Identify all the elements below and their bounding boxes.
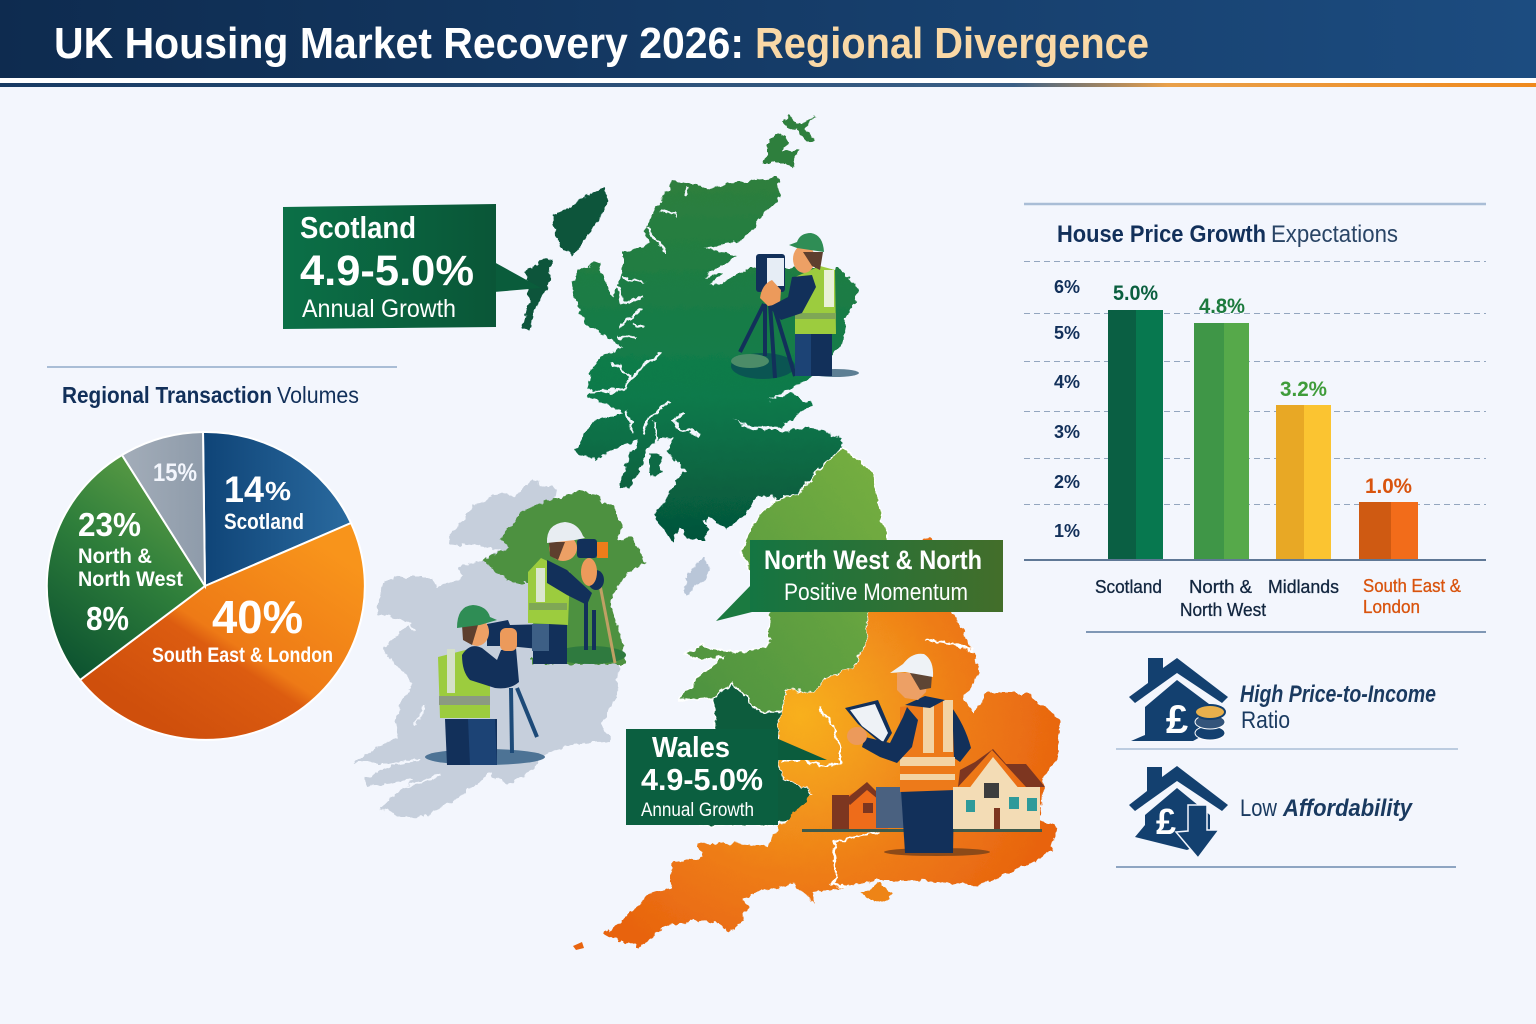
small orange house <box>832 782 889 829</box>
legs <box>901 790 954 853</box>
growth range: 4.9-5.0% <box>641 762 763 797</box>
safety vest <box>795 266 836 334</box>
Republic of Ireland landmass <box>353 480 618 818</box>
bar: Midlands: 3.2% <box>1280 378 1327 401</box>
camera device <box>756 254 785 292</box>
bar: South East & London: 1.0% <box>1365 475 1412 498</box>
bar: North & North West <box>1194 295 1249 560</box>
pie chart <box>47 432 365 740</box>
tripod legs <box>586 600 594 650</box>
regional boundaries <box>783 640 973 888</box>
box <box>626 729 778 825</box>
label: North & North West: North West <box>78 568 183 591</box>
bar: Scotland <box>1108 282 1163 560</box>
arm <box>862 707 918 763</box>
box <box>283 204 496 329</box>
y axis labels: 2% <box>1054 472 1080 492</box>
ground <box>554 646 626 664</box>
text: High Price-to-Income Ratio: High Price-to-Income <box>1240 681 1436 708</box>
title: UK Housing Market Recovery 2026: <box>54 19 744 68</box>
legs <box>533 624 567 664</box>
box <box>750 540 1003 612</box>
label: 40%: 40% <box>212 591 303 643</box>
slice: Scotland <box>203 432 351 586</box>
slice: North and North West <box>47 455 205 680</box>
cream house <box>953 749 1045 829</box>
callout: Wales <box>626 729 827 825</box>
Scotland label: Scotland <box>300 210 416 245</box>
shadow <box>884 848 990 856</box>
surveyor: Scotland <box>731 233 859 379</box>
ground shadows <box>731 353 859 379</box>
icon: house with pound and coins <box>1129 658 1228 742</box>
panel heading: Regional TransactionVolumes <box>62 382 359 408</box>
hand <box>760 280 781 306</box>
Wales label: Wales <box>652 732 730 764</box>
subheading: Positive Momentum <box>784 579 968 606</box>
Outer Hebrides <box>522 186 608 332</box>
Ireland coastal inlets <box>385 548 500 790</box>
camera <box>487 620 549 650</box>
label: 15%: 15% <box>153 459 197 487</box>
icon: house with pound and down arrow: £ <box>1156 801 1176 842</box>
callout: North West & North <box>716 540 1003 621</box>
label: North & North West <box>78 545 183 591</box>
surveyor: Ireland <box>425 605 549 765</box>
label: 14% <box>224 469 291 510</box>
pointer <box>776 738 827 760</box>
hand <box>500 628 517 651</box>
legs <box>445 719 497 765</box>
camera <box>577 539 597 558</box>
arm <box>547 560 592 605</box>
y axis labels: 3% <box>1054 422 1080 442</box>
label: 14%: % <box>265 476 291 506</box>
Isles of Scilly <box>573 942 584 950</box>
hard hat <box>890 654 933 677</box>
Annual Growth: Annual Growth <box>302 295 456 323</box>
back arm <box>950 705 971 762</box>
panel: affordability issues <box>1086 632 1486 867</box>
wooden tripod leg <box>600 585 615 663</box>
label: Scotland: Scotland <box>224 509 304 534</box>
heading: North West & North <box>764 545 982 575</box>
y axis labels <box>1054 277 1080 541</box>
x axis labels: Midlands <box>1268 577 1339 597</box>
bar: South East & London <box>1359 475 1418 560</box>
surveyor and houses: England <box>802 654 1045 856</box>
arm <box>462 646 519 688</box>
x axis labels: Scotland <box>1095 577 1162 597</box>
collar <box>905 696 945 708</box>
icon: house with pound and coins: £ <box>1166 698 1188 742</box>
surveyor: Northern Ireland <box>528 522 626 664</box>
text: Low Affordability: Low <box>1240 795 1278 822</box>
title highlight: Regional Divergence <box>755 19 1149 68</box>
y axis labels: 6% <box>1054 277 1080 297</box>
hard hat <box>547 522 585 543</box>
label: North & North West: North & <box>78 545 152 568</box>
bar: Scotland: 5.0% <box>1113 282 1158 305</box>
panel: house price growth expectations <box>1024 204 1486 620</box>
callout: Scotland <box>283 204 541 329</box>
hand <box>847 727 867 745</box>
Wales region <box>700 683 813 825</box>
x axis labels: London <box>1363 597 1420 617</box>
bar: Midlands <box>1276 378 1331 560</box>
x axis labels: North & <box>1189 577 1252 597</box>
text: Low Affordability: Affordability <box>1282 795 1414 822</box>
x axis labels: North West <box>1180 600 1266 620</box>
Annual Growth: Annual Growth <box>641 800 754 821</box>
x axis labels <box>1095 576 1461 620</box>
y axis labels: 1% <box>1054 521 1080 541</box>
label: 8%: 8% <box>86 600 129 637</box>
x axis <box>1024 559 1486 561</box>
Scotland landmass <box>571 177 860 543</box>
chart heading: House Price GrowthExpectations <box>1057 221 1398 248</box>
sleeve <box>588 570 604 590</box>
arm <box>769 275 816 320</box>
map: Great Britain <box>522 115 1060 950</box>
safety vest <box>900 700 955 792</box>
tripod <box>511 688 537 753</box>
tripod <box>740 304 795 378</box>
Isle of Arran <box>650 455 662 477</box>
pointer <box>494 262 541 292</box>
y axis labels: 5% <box>1054 323 1080 343</box>
safety vest <box>528 558 570 625</box>
ground line <box>802 829 1042 832</box>
England south and midlands region <box>603 537 1060 947</box>
label: 14%: 14 <box>224 469 264 510</box>
bar: North & North West: 4.8% <box>1199 295 1245 318</box>
panel: regional transaction volumes <box>47 367 397 740</box>
text: High Price-to-Income Ratio: Ratio <box>1241 707 1290 734</box>
safety vest <box>438 647 490 718</box>
North England and Wales north region <box>678 447 888 712</box>
label: South East & London: South East & London <box>152 644 333 667</box>
slice: other <box>122 432 205 586</box>
y axis labels: 4% <box>1054 372 1080 392</box>
map: Ireland <box>353 480 645 818</box>
head <box>549 535 577 561</box>
Scottish sea lochs <box>587 188 774 530</box>
header banner <box>0 0 1536 87</box>
Isle of Wight <box>862 883 892 902</box>
head <box>793 245 815 273</box>
label: 23%: 23% <box>78 506 141 543</box>
Shetland and Orkney islands <box>764 115 816 168</box>
Isle of Man <box>683 557 710 595</box>
neck and head <box>897 673 928 700</box>
Northern Ireland landmass <box>483 490 645 664</box>
x axis labels: South East & <box>1363 576 1461 596</box>
slice: South East and London <box>80 523 365 740</box>
icon: house with pound and down arrow <box>1129 766 1228 858</box>
legs <box>795 333 832 376</box>
hard hat <box>457 605 497 628</box>
text: High Price-to-Income Ratio <box>1240 681 1436 734</box>
growth range: 4.9-5.0% <box>300 247 474 295</box>
pointer <box>716 584 752 621</box>
clipboard <box>845 700 892 746</box>
gridlines <box>1024 262 1486 504</box>
head <box>465 618 489 646</box>
hand <box>581 558 597 586</box>
building behind <box>876 787 904 828</box>
shadow <box>425 749 545 765</box>
hard hat <box>789 233 824 252</box>
